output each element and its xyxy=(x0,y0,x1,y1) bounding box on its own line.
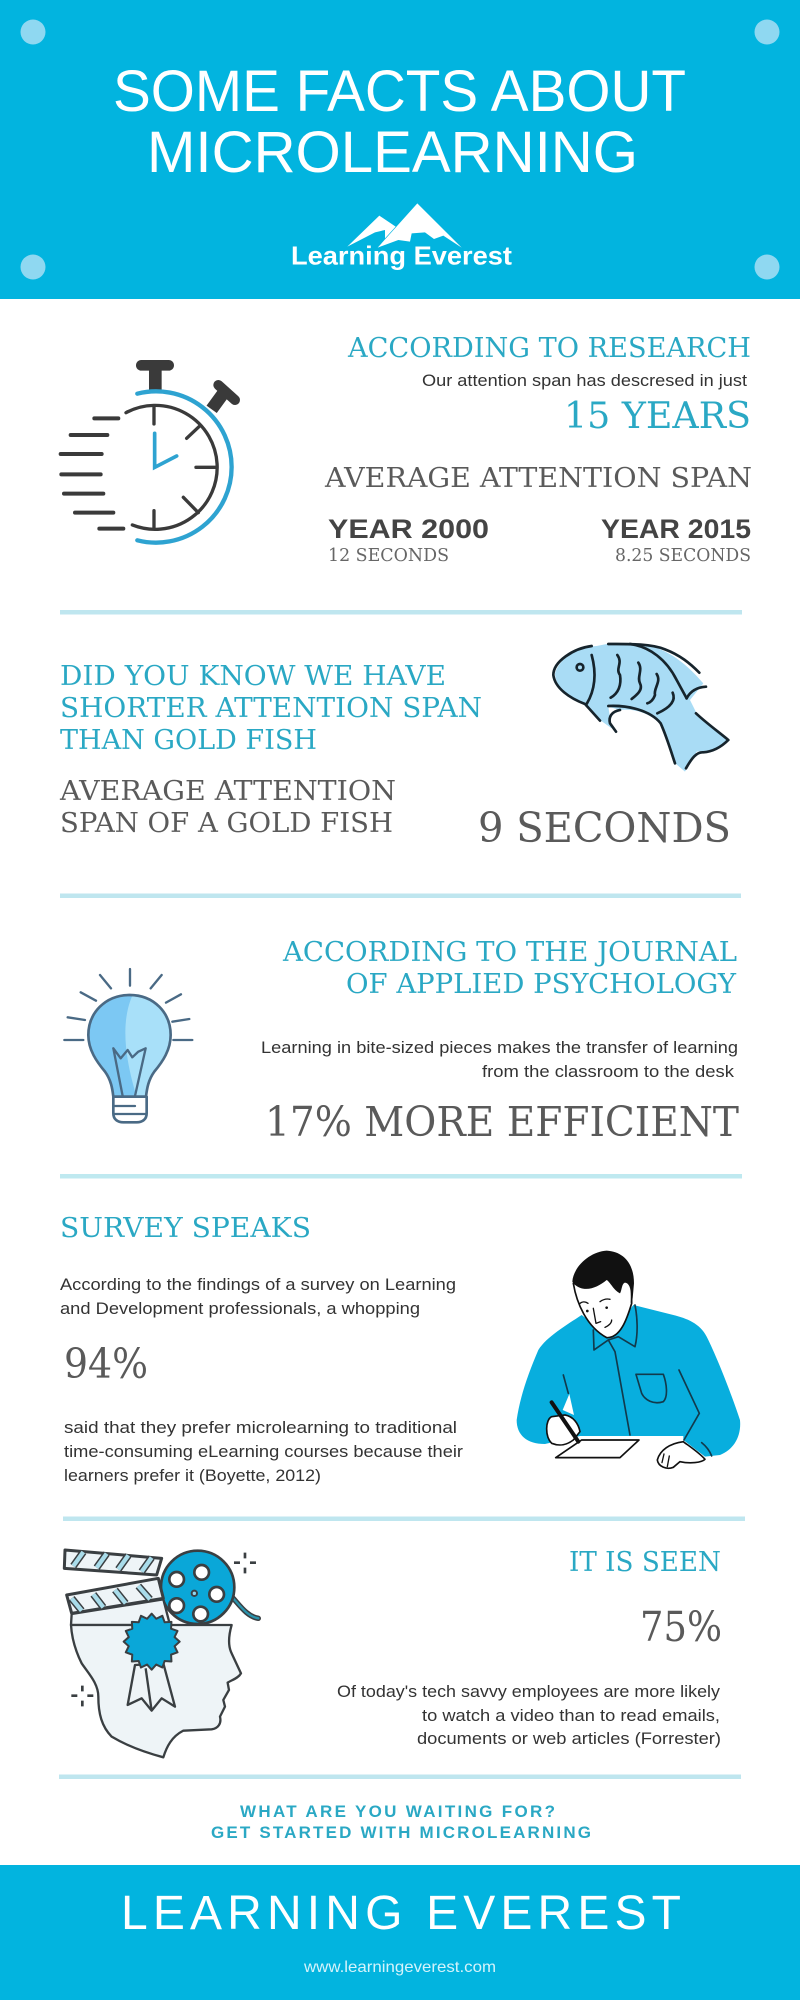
call to action xyxy=(211,1802,591,1842)
footer brand: LEARNING EVEREST xyxy=(121,1887,681,1940)
heading: did you know: DID YOU KNOW WE HAVE xyxy=(60,661,446,692)
panel: attention span research xyxy=(61,333,752,566)
icon: stopwatch xyxy=(61,360,235,543)
text: attention span decrease: Our attention span has descresed in just xyxy=(422,372,747,390)
call to action: GET STARTED WITH MICROLEARNING xyxy=(211,1823,591,1842)
heading: it is seen: IT IS SEEN xyxy=(569,1547,721,1578)
heading: did you know: SHORTER ATTENTION SPAN xyxy=(60,693,482,724)
stat: year 2000: YEAR 2000 xyxy=(328,514,489,544)
header panel xyxy=(0,0,800,299)
heading: survey speaks: SURVEY SPEAKS xyxy=(60,1213,311,1244)
text: survey result: learners prefer it (Boyette, 2012) xyxy=(64,1467,321,1485)
panel: journal of applied psychology xyxy=(64,937,739,1146)
icon: light bulb xyxy=(64,969,192,1122)
text: bite-sized learning xyxy=(261,1039,738,1081)
text: tech savvy employees xyxy=(337,1683,721,1748)
stat: year 2015: YEAR 2015 xyxy=(601,514,751,544)
text: average attention span of a gold fish: SPAN OF A GOLD FISH xyxy=(60,808,393,839)
text: survey result: said that they prefer microlearning to traditional xyxy=(64,1419,457,1437)
text: bite-sized learning: from the classroom to the desk xyxy=(482,1063,735,1081)
text: survey intro: and Development professionals, a whopping xyxy=(60,1300,420,1318)
stat: 75%: 75% xyxy=(640,1603,722,1651)
heading: average attention span: AVERAGE ATTENTION SPAN xyxy=(324,463,752,494)
title: SOME FACTS ABOUT xyxy=(113,59,686,124)
stat: 17% more efficient: 17% MORE EFFICIENT xyxy=(265,1098,739,1146)
title xyxy=(113,59,686,185)
corner dots xyxy=(20,20,780,280)
text: average attention span of a gold fish xyxy=(59,776,396,839)
text: tech savvy employees: Of today's tech savvy employees are more likely xyxy=(337,1683,721,1701)
heading: did you know xyxy=(60,661,482,756)
logo: Learning Everest: Learning Everest xyxy=(291,240,512,270)
text: survey result xyxy=(64,1419,464,1485)
heading: did you know: THAN GOLD FISH xyxy=(60,725,317,756)
footer url: www.learningeverest.com xyxy=(303,1959,496,1976)
text: survey intro xyxy=(60,1276,456,1318)
logo: Learning Everest xyxy=(291,203,512,270)
text: tech savvy employees: documents or web articles (Forrester) xyxy=(417,1730,721,1748)
panel: survey speaks xyxy=(60,1213,740,1485)
icon: fish xyxy=(553,644,728,772)
footer panel xyxy=(0,1865,800,2000)
stat: year 2015 xyxy=(601,514,751,566)
title: MICROLEARNING xyxy=(147,120,638,185)
panel: it is seen xyxy=(64,1547,722,1757)
stat: year 2000: 12 SECONDS xyxy=(328,545,449,566)
stat: year 2015: 8.25 SECONDS xyxy=(615,545,751,566)
heading: according to the journal: ACCORDING TO THE JOURNAL xyxy=(282,937,737,968)
stat: 94%: 94% xyxy=(64,1340,148,1388)
heading: according to the journal xyxy=(282,937,737,1000)
heading: according to the journal: OF APPLIED PSYCHOLOGY xyxy=(346,969,737,1000)
stat: year 2000 xyxy=(328,514,489,566)
icon: man writing xyxy=(517,1251,740,1468)
icon: head with film clapper and reel xyxy=(64,1550,258,1757)
text: survey result: time-consuming eLearning courses because their xyxy=(64,1443,464,1461)
call to action: WHAT ARE YOU WAITING FOR? xyxy=(240,1802,555,1821)
text: average attention span of a gold fish: AVERAGE ATTENTION xyxy=(59,776,396,807)
text: bite-sized learning: Learning in bite-sized pieces makes the transfer of learning xyxy=(261,1039,738,1057)
heading: according to research: ACCORDING TO RESEARCH xyxy=(347,333,751,364)
stat: 15 years: 15 YEARS xyxy=(564,396,751,437)
text: tech savvy employees: to watch a video than to read emails, xyxy=(422,1707,720,1725)
text: survey intro: According to the findings of a survey on Learning xyxy=(60,1276,456,1294)
panel: gold fish xyxy=(59,644,731,852)
stat: 9 seconds: 9 SECONDS xyxy=(478,804,731,852)
